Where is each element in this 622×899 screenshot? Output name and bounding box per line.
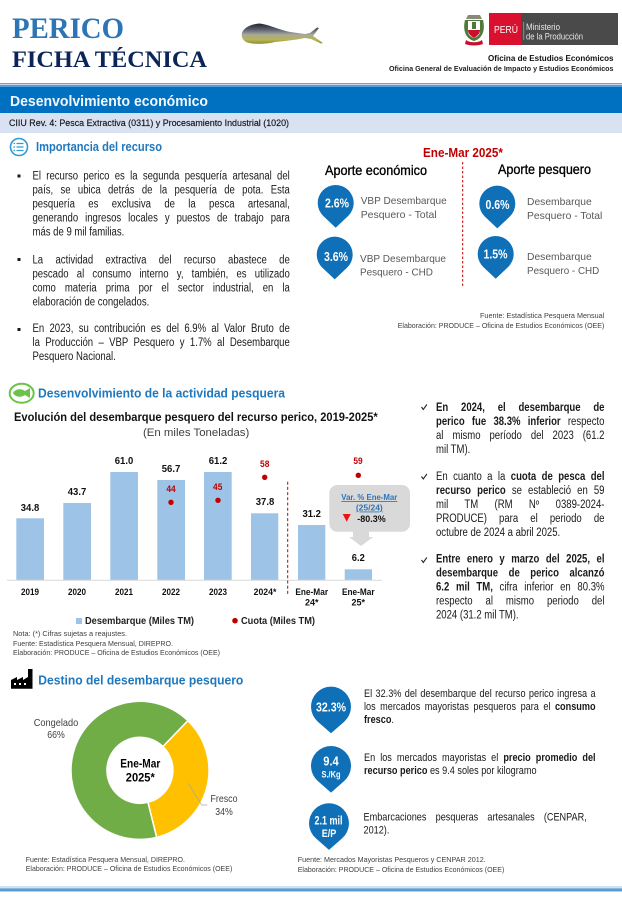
chart subtitle: (En miles Toneladas) — [143, 427, 249, 439]
pin: 2.1 mil E/P: 2.1 mil — [314, 816, 342, 828]
source note: Fuente: Estadística Pesquera Mensual — [480, 311, 605, 320]
text block: embarcaciones: Embarcaciones pesqueras artesanales (CENPAR, — [364, 811, 587, 823]
legend: Cuota (Miles TM) — [241, 616, 315, 627]
bar chart — [7, 455, 382, 608]
callout: var %: Var. % Ene-Mar — [341, 492, 398, 502]
pin: 1.5% — [478, 236, 514, 279]
x axis labels — [21, 587, 375, 608]
chart notes: Fuente: Estadística Pesquera Mensual, DIREPRO. — [13, 639, 173, 648]
text block: cuota: En cuanto a la cuota de pesca del — [436, 471, 604, 483]
label: congelado: 66% — [47, 729, 65, 741]
text block: paragraph 1: más de 9 mil familias. — [32, 226, 124, 238]
source note: destino: Fuente: Estadística Pesquera Mensual, DIREPRO. — [26, 855, 185, 864]
text block: paragraph 1 — [32, 170, 290, 242]
callout: var %: (25/24) — [356, 502, 383, 512]
text block: 2025 — [436, 552, 604, 624]
pin: 3.6% — [317, 237, 353, 279]
pin: 2.6% — [318, 185, 354, 228]
source note: mercados: Elaboración: PRODUCE – Oficina de Estudios Económicos (OEE) — [298, 865, 505, 874]
office names: Oficina General de Evaluación de Impacto y Estudios Económicos — [389, 64, 614, 73]
text block: precio promedio — [364, 752, 596, 780]
band: CIIU: CIIU Rev. 4: Pesca Extractiva (0311) y Procesamiento Industrial (1020) — [9, 118, 289, 128]
heading: destino: Destino del desembarque pesquero — [38, 674, 244, 688]
quota markers: 59 — [353, 456, 363, 466]
bar values: 56.7 — [162, 463, 180, 475]
icon: perico fish — [242, 24, 323, 44]
text block: paragraph 3 — [32, 322, 290, 366]
icon: escudo nacional — [464, 15, 484, 46]
pin: 0.6%: 0.6% — [486, 197, 510, 212]
text block: consumo fresco: los mercados mayoristas pesqueros para el consumo — [364, 701, 596, 713]
pin: 1.5%: 1.5% — [484, 247, 508, 262]
label: desembarque total: Pesquero - Total — [527, 210, 602, 222]
text block: paragraph 1: pesquería es exclusiva de la pesca artesanal, — [32, 198, 290, 210]
text block: paragraph 1: generando ingresos locales y puestos de trabajo para — [32, 212, 290, 224]
label: congelado: Congelado — [34, 717, 78, 729]
x axis labels: 25* — [352, 598, 365, 608]
banner: desenvolvimiento económico: Desenvolvimiento económico — [10, 93, 208, 110]
heading: ene-mar 2025: Ene-Mar 2025* — [423, 145, 504, 160]
text block: paragraph 2: pescado al consumo interno y, también, es utilizado — [32, 268, 290, 280]
callout: var %: -80.3% — [357, 514, 386, 525]
x axis labels: 2020 — [68, 587, 86, 598]
legend — [76, 616, 315, 627]
quota markers: 45 — [213, 482, 222, 492]
bar values: 31.2 — [302, 508, 321, 520]
text block: 2025: respecto al mismo periodo del — [436, 596, 604, 608]
text block: paragraph 3: Pesquero Nacional. — [32, 351, 116, 363]
label: desembarque total — [527, 196, 602, 222]
text block: paragraph 2: como materia prima por el sector industrial, en la — [32, 282, 290, 294]
heading: importancia del recurso: Importancia del recurso — [36, 140, 162, 154]
header — [12, 13, 618, 73]
banner: desenvolvimiento económico — [0, 85, 622, 113]
donut center label — [120, 756, 161, 784]
bar values: 43.7 — [68, 486, 86, 498]
heading: aporte económico: Aporte económico — [325, 162, 427, 178]
bar values: 37.8 — [256, 496, 274, 508]
source note: Elaboración: PRODUCE – Oficina de Estudios Económicos (OEE) — [398, 321, 605, 330]
pin: 9.4 S./Kg: S./Kg — [322, 770, 341, 780]
text block: paragraph 1: país, se ubica detrás de la pesquería de pota. Esta — [32, 184, 290, 196]
callout: var % — [329, 485, 410, 546]
x axis labels: Ene-Mar — [342, 587, 375, 598]
text block: paragraph 2: elaboración de congelados. — [32, 296, 149, 308]
text block: precio promedio: recurso perico es 9.4 soles por kilogramo — [364, 765, 537, 777]
text block: cuota — [436, 470, 604, 542]
label: VBP total — [361, 195, 447, 221]
pin: 0.6% — [479, 186, 515, 228]
donut chart — [34, 701, 238, 839]
panel: destino del desembarque — [11, 669, 596, 874]
title: perico: PERICO — [12, 13, 124, 45]
text block: 2025: 2024 (31.2 mil TM). — [436, 610, 519, 622]
label: desembarque CHD: Pesquero - CHD — [527, 265, 600, 277]
panel: desenvolvimiento de la actividad pesquera — [7, 384, 604, 657]
text block: consumo fresco: El 32.3% del desembarque del recurso perico ingresa a — [364, 688, 596, 700]
text block: cuota: PRODUCE) para el periodo de — [436, 513, 604, 525]
office names: Oficina de Estudios Económicos — [488, 53, 614, 63]
text block: paragraph 2: La actividad extractiva del recurso abastece de — [32, 254, 290, 266]
pin: 3.6%: 3.6% — [324, 249, 348, 264]
bar values: 6.2 — [352, 552, 365, 564]
source note: destino — [26, 855, 233, 873]
pin: 32.3%: 32.3% — [316, 700, 346, 714]
label: desembarque total: Desembarque — [527, 196, 592, 208]
logo: PERÚ Ministerio de la Producción: de la Producción — [526, 32, 583, 42]
icon: factory — [11, 669, 32, 689]
label: congelado — [34, 717, 78, 741]
heading: aporte pesquero: Aporte pesquero — [498, 161, 591, 177]
text block: 2024: al mismo período del 2023 (61.2 — [436, 430, 604, 442]
pin: 9.4 S./Kg: 9.4 — [323, 754, 339, 768]
text block: precio promedio: En los mercados mayoristas el precio promedio del — [364, 752, 596, 764]
office names — [389, 53, 614, 73]
bar values: 61.0 — [115, 455, 133, 467]
donut center label: 2025* — [126, 770, 155, 784]
bar values: 34.8 — [21, 502, 39, 514]
chart notes: Elaboración: PRODUCE – Oficina de Estudios Económicos (OEE) — [13, 648, 220, 657]
icon: list — [10, 138, 28, 156]
text block: paragraph 1: El recurso perico es la segunda pesquería artesanal del — [32, 170, 290, 182]
bar values — [21, 455, 365, 564]
logo: PERÚ Ministerio de la Producción: PERÚ — [494, 23, 518, 36]
quota markers: 44 — [166, 484, 176, 494]
x axis labels: 2024* — [254, 587, 277, 598]
panel: aporte económico y pesquero — [317, 145, 605, 330]
pin: 9.4 S./Kg — [311, 746, 351, 793]
bar values: 61.2 — [209, 455, 227, 467]
title: ficha técnica: FICHA TÉCNICA — [12, 47, 207, 73]
label: VBP CHD: Pesquero - CHD — [360, 266, 433, 278]
band: CIIU — [0, 113, 622, 133]
heading: desenvolvimiento: Desenvolvimiento de la actividad pesquera — [38, 386, 286, 400]
label: desembarque CHD — [527, 251, 600, 277]
x axis labels: Ene-Mar — [295, 587, 328, 598]
quota markers: 58 — [260, 459, 269, 469]
x axis labels: 2022 — [162, 587, 180, 598]
source note: mercados — [298, 855, 505, 874]
x axis labels: 2021 — [115, 587, 134, 598]
icon: green fish — [10, 384, 34, 403]
text block: embarcaciones: 2012). — [364, 824, 389, 836]
label: VBP total: VBP Desembarque — [361, 195, 447, 207]
quota markers — [166, 456, 363, 505]
logo: PERÚ Ministerio de la Producción: Ministerio — [526, 22, 560, 32]
text block: cuota: octubre de 2024 a abril 2025. — [436, 527, 560, 539]
text block: 2025: desembarque de perico alcanzó — [436, 568, 604, 580]
pin: 2.1 mil E/P: E/P — [322, 828, 336, 840]
text block: cuota: mil TM (RM Nº 0389-2024- — [436, 499, 604, 511]
text block: consumo fresco: fresco. — [364, 714, 394, 726]
text block: 2024: En 2024, el desembarque de — [436, 402, 604, 414]
text block: 2024: perico fue 38.3% inferior respecto — [436, 416, 604, 428]
chart notes — [13, 629, 220, 657]
panel: importancia del recurso — [10, 138, 290, 366]
pin: 2.6%: 2.6% — [325, 196, 349, 211]
pin: 2.1 mil E/P — [309, 803, 349, 850]
check marks — [422, 404, 427, 562]
bullets — [18, 174, 20, 331]
x axis labels: 24* — [305, 598, 319, 608]
label: desembarque CHD: Desembarque — [527, 251, 592, 263]
text block: 2024: mil TM). — [436, 444, 470, 456]
source note: mercados: Fuente: Mercados Mayoristas Pesqueros y CENPAR 2012. — [298, 855, 486, 864]
text block: paragraph 3: En 2023, su contribución es del 6.9% al Valor Bruto de — [32, 323, 290, 335]
bars — [16, 472, 372, 580]
text block: consumo fresco — [364, 688, 596, 728]
label: fresco — [210, 793, 238, 818]
chart title: Evolución del desembarque pesquero del recurso perico, 2019-2025* — [14, 410, 378, 424]
x axis labels: 2023 — [209, 587, 227, 598]
label: fresco: Fresco — [210, 793, 238, 805]
pin: 32.3% — [311, 687, 351, 733]
logo: PERÚ Ministerio de la Producción — [489, 13, 618, 45]
source note — [398, 311, 605, 330]
x axis labels: 2019 — [21, 587, 39, 598]
label: VBP CHD: VBP Desembarque — [360, 253, 446, 265]
chart notes: Nota: (*) Cifras sujetas a reajustes. — [13, 629, 127, 638]
text block: 2025: 6.2 mil TM, cifra inferior en 80.3% — [436, 582, 604, 594]
text block: 2025: Entre enero y marzo del 2025, el — [436, 554, 604, 566]
label: VBP CHD — [360, 253, 446, 278]
label: fresco: 34% — [215, 806, 233, 818]
text block: paragraph 3: la Producción – VBP Pesquero y 1.7% al Desembarque — [32, 337, 290, 349]
donut center label: Ene-Mar — [120, 756, 161, 770]
source note: destino: Elaboración: PRODUCE – Oficina de Estudios Económicos (OEE) — [26, 864, 233, 873]
text block: cuota: recurso perico se estableció en 59 — [436, 485, 604, 497]
label: VBP total: Pesquero - Total — [361, 209, 437, 221]
legend: Desembarque (Miles TM) — [85, 616, 194, 627]
text block: 2024 — [436, 401, 604, 459]
text block: embarcaciones — [364, 811, 587, 839]
text block: paragraph 2 — [32, 253, 290, 311]
